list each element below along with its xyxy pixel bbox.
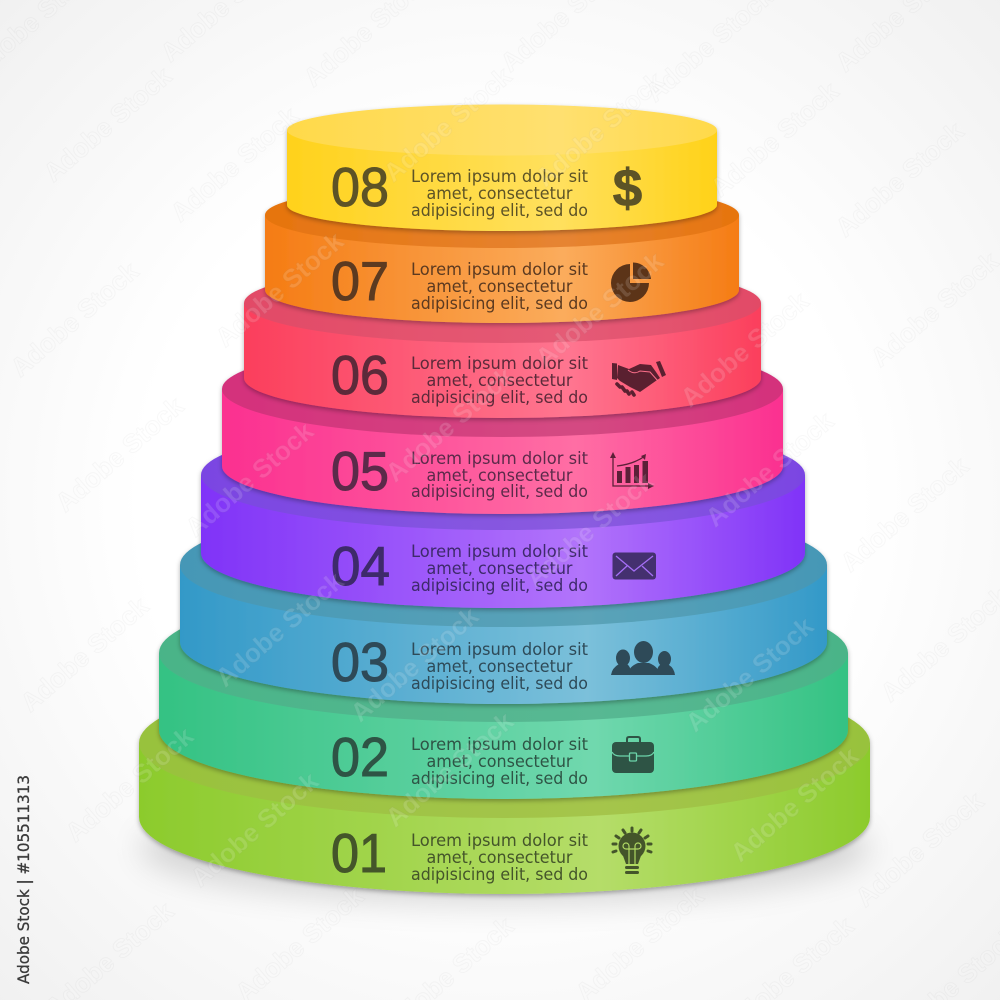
icon: people	[611, 641, 675, 675]
tier 05 body	[222, 341, 783, 514]
watermarks: Adobe Stock	[680, 610, 820, 738]
tier 03 text: adipisicing elit, sed do	[411, 674, 588, 693]
tier 06 text: amet, consectetur	[426, 371, 573, 390]
icon: briefcase	[612, 737, 654, 773]
tier 03 body	[180, 503, 827, 704]
watermarks: Adobe Stock	[700, 405, 840, 533]
tier 05 text: amet, consectetur	[426, 466, 573, 485]
tier 06 text: adipisicing elit, sed do	[411, 388, 588, 407]
tier 01 text: Lorem ipsum dolor sit	[411, 831, 589, 850]
tier 02 text: adipisicing elit, sed do	[411, 769, 588, 788]
watermarks: Adobe Stock	[50, 390, 190, 518]
watermarks: Adobe Stock	[380, 360, 520, 488]
watermarks: Adobe Stock	[675, 285, 815, 413]
tier 08 number: 08	[331, 156, 389, 218]
watermarks: Adobe Stock	[15, 590, 155, 718]
tier 08 text: Lorem ipsum dolor sit	[411, 167, 589, 186]
tier 05 text: Lorem ipsum dolor sit	[411, 449, 589, 468]
base shadow	[140, 792, 870, 904]
tier 01	[139, 668, 870, 894]
watermarks: Adobe Stock	[210, 225, 350, 353]
tier 08 body	[287, 104, 717, 231]
icon: handshake	[612, 361, 666, 395]
tier 04 text: adipisicing elit, sed do	[411, 576, 588, 595]
watermarks: Adobe Stock	[165, 100, 305, 228]
tier 08	[287, 104, 717, 231]
tier 07 text: amet, consectetur	[426, 277, 573, 296]
tier 03 text: amet, consectetur	[426, 657, 573, 676]
tier 03 number: 03	[331, 631, 389, 693]
tier 06 number: 06	[331, 344, 389, 406]
watermarks: Adobe Stock	[830, 115, 970, 243]
tier 08 text: amet, consectetur	[426, 184, 573, 203]
watermarks: Adobe Stock	[185, 765, 325, 893]
watermarks: Adobe Stock	[38, 60, 178, 188]
watermarks: Adobe Stock	[210, 565, 350, 693]
tier 05 number: 05	[331, 440, 389, 502]
tier 06 body	[244, 263, 761, 418]
tier 02	[159, 584, 848, 799]
tier 01 number: 01	[331, 822, 387, 884]
tier 05 text: adipisicing elit, sed do	[411, 482, 588, 501]
icon: pie chart	[611, 262, 651, 302]
watermarks: Adobe Stock	[345, 600, 485, 728]
watermarks: Adobe Stock	[180, 415, 320, 543]
tier 07	[265, 182, 739, 323]
tier 03 text: Lorem ipsum dolor sit	[411, 640, 589, 659]
icon: dollar: $	[613, 159, 642, 218]
watermarks: Adobe Stock	[725, 740, 865, 868]
tier 03	[180, 503, 827, 704]
tier 01 text: amet, consectetur	[426, 848, 573, 867]
tier 06 text: Lorem ipsum dolor sit	[411, 354, 589, 373]
icon: light bulb	[613, 828, 651, 874]
watermarks: Adobe Stock	[530, 65, 670, 193]
watermarks: Adobe Stock	[520, 465, 660, 593]
watermarks: Adobe Stock	[380, 705, 520, 833]
tier 07 text: adipisicing elit, sed do	[411, 294, 588, 313]
tier 02 body	[159, 584, 848, 799]
watermarks: Adobe Stock	[5, 255, 145, 383]
icon: envelope	[612, 552, 656, 580]
tier 01 text: adipisicing elit, sed do	[411, 865, 588, 884]
watermarks: Adobe Stock	[530, 245, 670, 373]
watermarks: Adobe Stock	[705, 75, 845, 203]
tier 06	[244, 263, 761, 418]
watermarks: Adobe Stock	[850, 785, 990, 913]
tier 05	[222, 341, 783, 514]
side caption: Adobe Stock | #105511313	[14, 775, 33, 984]
tier 04	[201, 420, 805, 608]
watermarks: Adobe Stock	[60, 720, 200, 848]
tier 02 text: amet, consectetur	[426, 752, 573, 771]
tier 01 body	[139, 668, 870, 894]
watermarks: Adobe Stock	[865, 245, 1000, 373]
watermarks: Adobe Stock	[378, 60, 518, 188]
tier 04 body	[201, 420, 805, 608]
tier 04 text: Lorem ipsum dolor sit	[411, 542, 589, 561]
tier 02 number: 02	[331, 726, 389, 788]
tier 07 number: 07	[331, 250, 389, 312]
tier 08 text: adipisicing elit, sed do	[411, 201, 588, 220]
tier 02 text: Lorem ipsum dolor sit	[411, 735, 589, 754]
tier 04 text: amet, consectetur	[426, 559, 573, 578]
tier 04 number: 04	[331, 535, 390, 597]
tier 07 text: Lorem ipsum dolor sit	[411, 260, 589, 279]
watermarks: Adobe Stock	[835, 450, 975, 578]
tier 07 body	[265, 182, 739, 323]
icon: growth chart	[610, 452, 654, 489]
